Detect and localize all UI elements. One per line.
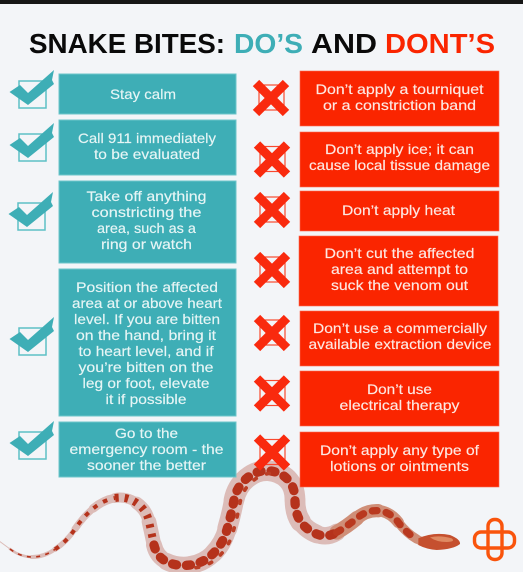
panel: do 4: it if possible	[106, 391, 187, 407]
panel: dont 5	[300, 311, 499, 366]
panel: do 3: Take off anything	[86, 188, 206, 204]
panel: do 1: Stay calm	[110, 86, 176, 102]
panel: dont 4	[299, 236, 498, 306]
panel: dont 1: Don’t apply a tourniquet	[316, 81, 484, 97]
icon: cross 2	[257, 144, 287, 174]
panel: do 4: area at or above heart	[72, 295, 222, 311]
panel: do 3: area, such as a	[97, 220, 196, 236]
panel: do 4	[59, 269, 236, 416]
panel: dont 2: cause local tissue damage	[309, 157, 490, 173]
illustration: corn snake	[0, 471, 460, 568]
panel: dont 7	[300, 432, 499, 487]
panel: do 4: to heart level, and if	[78, 343, 214, 359]
panel: dont 3	[300, 191, 499, 231]
panel: do 3: ring or watch	[101, 236, 192, 252]
panel: do 4: leg or foot, elevate	[82, 375, 210, 391]
panel: do 1	[59, 74, 236, 114]
panel: do 5	[59, 422, 236, 477]
icon: check 4	[10, 317, 54, 355]
icon: check 5	[10, 421, 54, 459]
panel: dont 6	[300, 371, 499, 426]
icon: cross 5	[257, 318, 287, 348]
panel: do 2: to be evaluated	[94, 146, 200, 162]
panel: dont 4: Don’t cut the affected	[324, 245, 474, 261]
panel: dont 2: Don’t apply ice; it can	[325, 141, 474, 157]
title: DO’S	[234, 28, 303, 59]
panel: do 2	[59, 120, 236, 175]
icon: cross 1	[256, 83, 286, 113]
panel: dont 4: area and attempt to	[331, 261, 468, 277]
panel: do 5: emergency room - the	[70, 441, 224, 457]
panel: dont 6: Don’t use	[367, 381, 432, 397]
icon: cross 3	[257, 195, 287, 225]
panel: do 4: you’re bitten on the	[78, 359, 214, 375]
panel: do 4: level. If you are bitten	[74, 311, 220, 327]
panel: dont 5: available extraction device	[308, 336, 492, 352]
panel: do 4: Position the affected	[76, 279, 218, 295]
panel: do 4: on the hand, bring it	[76, 327, 216, 343]
title: AND	[311, 28, 377, 59]
panel: dont 4: suck the venom out	[331, 277, 468, 293]
panel: dont 1	[300, 71, 499, 126]
panel: dont 1: or a constriction band	[323, 97, 476, 113]
panel: dont 3: Don’t apply heat	[342, 202, 455, 218]
title: SNAKE BITES:	[29, 28, 225, 59]
panel: do 3	[59, 181, 236, 263]
panel: dont 6: electrical therapy	[340, 397, 460, 413]
icon: check 3	[8, 192, 53, 230]
icon: cross 4	[257, 255, 287, 285]
title: DONT’S	[385, 28, 495, 59]
icon: cross 7	[257, 438, 287, 468]
panel: do 3: constricting the	[92, 204, 202, 220]
icon: cross 6	[257, 378, 287, 408]
panel: dont 5: Don’t use a commercially	[313, 320, 487, 336]
panel: dont 2	[300, 132, 499, 187]
icon: check 1	[10, 70, 54, 108]
icon: check 2	[10, 123, 54, 161]
panel: do 2: Call 911 immediately	[78, 130, 216, 146]
title	[29, 28, 495, 59]
panel: dont 7: Don’t apply any type of	[320, 442, 479, 458]
panel: do 5: Go to the	[115, 425, 178, 441]
panel: dont 7: lotions or ointments	[330, 458, 469, 474]
panel: do 5: sooner the better	[87, 457, 206, 473]
logo	[474, 520, 514, 560]
